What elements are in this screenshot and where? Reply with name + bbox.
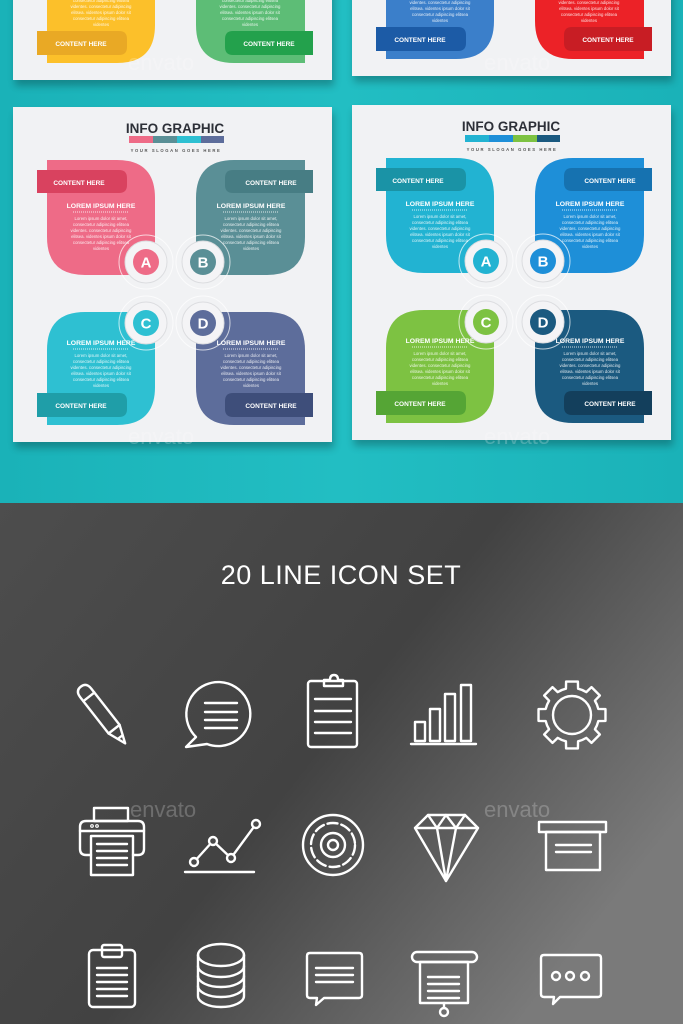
card D green: CONTENT HERE bbox=[243, 41, 295, 48]
card C: videntes. consectetur adipiscing bbox=[71, 365, 132, 370]
icon: diamond bbox=[415, 815, 478, 881]
card B: videntes bbox=[243, 246, 259, 251]
card B: LOREM IPSUM HERE bbox=[217, 203, 286, 210]
icon: gear bbox=[539, 682, 605, 748]
card D red bbox=[535, 0, 652, 59]
card A: videntes. consectetur adipiscing bbox=[71, 228, 132, 233]
card D red: CONTENT HERE bbox=[582, 37, 634, 44]
badges A B C D bbox=[459, 234, 570, 349]
card C: Lorem ipsum dolor sit amet, bbox=[413, 351, 467, 356]
card C: Lorem ipsum dolor sit amet, bbox=[74, 353, 128, 358]
card B bbox=[535, 158, 652, 273]
watermarks: envato bbox=[484, 797, 550, 822]
card C bbox=[37, 312, 155, 425]
card D: consectetur adipiscing elitsea bbox=[562, 375, 619, 380]
icon: chat box bbox=[307, 953, 362, 1005]
watermarks: envato bbox=[484, 424, 550, 449]
card C: LOREM IPSUM HERE bbox=[67, 340, 136, 347]
title bbox=[462, 119, 560, 152]
card D: CONTENT HERE bbox=[584, 401, 636, 408]
panel: top-right (blue/red) bbox=[352, 0, 673, 82]
icon set grid bbox=[75, 675, 606, 1016]
card D green: elitsea. videntes ipsum dolor sit bbox=[220, 10, 281, 15]
heading: 20 LINE ICON SET: 20 LINE ICON SET bbox=[221, 560, 461, 590]
card B: consectetur adipiscing elitsea bbox=[223, 240, 280, 245]
card C blue: elitsea. videntes ipsum dolor sit bbox=[410, 6, 471, 11]
card C yellow: consectetur adipiscing elitsea bbox=[73, 16, 130, 21]
card D: LOREM IPSUM HERE bbox=[217, 340, 286, 347]
card C blue: videntes bbox=[432, 18, 448, 23]
card B: consectetur adipiscing elitsea bbox=[562, 220, 619, 225]
card C yellow bbox=[37, 0, 155, 63]
card B: elitsea. videntes ipsum dolor sit bbox=[560, 232, 621, 237]
badges A B C D: B bbox=[198, 254, 209, 272]
card D red: videntes. consectetur adipiscing bbox=[559, 0, 620, 5]
badges A B C D: B bbox=[538, 254, 549, 270]
card D: videntes bbox=[582, 381, 598, 386]
badges A B C D: C bbox=[481, 314, 492, 332]
card A: videntes bbox=[93, 246, 109, 251]
card C: consectetur adipiscing elitsea bbox=[412, 375, 469, 380]
card B: CONTENT HERE bbox=[245, 180, 297, 187]
card A: videntes bbox=[432, 244, 448, 249]
title: YOUR SLOGAN GOES HERE bbox=[131, 148, 221, 153]
card D: consectetur adipiscing elitsea bbox=[223, 359, 280, 364]
card C bbox=[376, 310, 494, 423]
card A: videntes. consectetur adipiscing bbox=[410, 226, 471, 231]
card D red: videntes bbox=[581, 18, 597, 23]
card A: Lorem ipsum dolor sit amet, bbox=[413, 214, 467, 219]
icon: pencil bbox=[75, 682, 131, 748]
card A: consectetur adipiscing elitsea bbox=[73, 222, 130, 227]
icon: printer bbox=[80, 808, 144, 875]
card B: CONTENT HERE bbox=[584, 178, 636, 185]
card D red: consectetur adipiscing elitsea bbox=[561, 12, 618, 17]
card C: consectetur adipiscing elitsea bbox=[73, 377, 130, 382]
card C yellow: CONTENT HERE bbox=[55, 41, 107, 48]
icon: bar chart bbox=[411, 685, 476, 744]
card D green: videntes bbox=[242, 22, 258, 27]
card B: videntes bbox=[582, 244, 598, 249]
watermarks bbox=[128, 50, 550, 822]
card C yellow: elitsea. videntes ipsum dolor sit bbox=[71, 10, 132, 15]
card A: consectetur adipiscing elitsea bbox=[412, 220, 469, 225]
badges A B C D: D bbox=[198, 316, 209, 332]
card A: elitsea. videntes ipsum dolor sit bbox=[71, 234, 132, 239]
card D red: elitsea. videntes ipsum dolor sit bbox=[559, 6, 620, 11]
card D green: consectetur adipiscing elitsea bbox=[222, 16, 279, 21]
dark icon section background bbox=[0, 503, 683, 1024]
icon: target chip bbox=[303, 815, 363, 875]
badges A B C D bbox=[119, 235, 230, 350]
card D: Lorem ipsum dolor sit amet, bbox=[224, 353, 278, 358]
icon: clipboard bbox=[308, 675, 357, 747]
card D: videntes. consectetur adipiscing bbox=[560, 363, 621, 368]
title: YOUR SLOGAN GOES HERE bbox=[467, 147, 557, 152]
card B: videntes. consectetur adipiscing bbox=[221, 228, 282, 233]
card C: elitsea. videntes ipsum dolor sit bbox=[410, 369, 471, 374]
card C: LOREM IPSUM HERE bbox=[406, 338, 475, 345]
title bbox=[126, 121, 224, 153]
card D: elitsea. videntes ipsum dolor sit bbox=[560, 369, 621, 374]
card A: CONTENT HERE bbox=[53, 180, 105, 187]
badges A B C D: A bbox=[481, 254, 492, 270]
icon: presentation board bbox=[412, 952, 477, 1016]
card C: elitsea. videntes ipsum dolor sit bbox=[71, 371, 132, 376]
card C: CONTENT HERE bbox=[394, 401, 446, 408]
card B: Lorem ipsum dolor sit amet, bbox=[224, 216, 278, 221]
card B: LOREM IPSUM HERE bbox=[556, 201, 625, 208]
card B: consectetur adipiscing elitsea bbox=[562, 238, 619, 243]
card A: LOREM IPSUM HERE bbox=[67, 203, 136, 210]
icon: coin stack database bbox=[198, 944, 244, 1007]
card D: videntes. consectetur adipiscing bbox=[221, 365, 282, 370]
card A: CONTENT HERE bbox=[392, 178, 444, 185]
card A: consectetur adipiscing elitsea bbox=[412, 238, 469, 243]
watermarks: envato bbox=[484, 50, 550, 75]
card A: consectetur adipiscing elitsea bbox=[73, 240, 130, 245]
card A: elitsea. videntes ipsum dolor sit bbox=[410, 232, 471, 237]
card C blue: videntes. consectetur adipiscing bbox=[410, 0, 471, 5]
card C: consectetur adipiscing elitsea bbox=[73, 359, 130, 364]
card B bbox=[196, 160, 313, 275]
icon: speech bubble bbox=[186, 682, 250, 747]
card D: LOREM IPSUM HERE bbox=[556, 338, 625, 345]
badges A B C D: C bbox=[141, 316, 152, 332]
card C yellow: videntes. consectetur adipiscing bbox=[71, 4, 132, 9]
watermarks: envato bbox=[128, 50, 194, 75]
card D bbox=[535, 310, 652, 423]
card C blue bbox=[376, 0, 494, 59]
card C yellow: videntes bbox=[93, 22, 109, 27]
icon: archive box bbox=[539, 822, 606, 870]
card D: Lorem ipsum dolor sit amet, bbox=[563, 351, 617, 356]
card C: consectetur adipiscing elitsea bbox=[412, 357, 469, 362]
card C: CONTENT HERE bbox=[55, 403, 107, 410]
card C blue: consectetur adipiscing elitsea bbox=[412, 12, 469, 17]
card C blue: CONTENT HERE bbox=[394, 37, 446, 44]
card B: elitsea. videntes ipsum dolor sit bbox=[221, 234, 282, 239]
icon: small clipboard bbox=[89, 945, 135, 1007]
panel: left infographic (pink/grey/cyan/slate) bbox=[13, 107, 334, 448]
card A: Lorem ipsum dolor sit amet, bbox=[74, 216, 128, 221]
card C: videntes. consectetur adipiscing bbox=[410, 363, 471, 368]
card B: videntes. consectetur adipiscing bbox=[560, 226, 621, 231]
card D: consectetur adipiscing elitsea bbox=[223, 377, 280, 382]
card C: videntes bbox=[432, 381, 448, 386]
panel: top-left (yellow/green) bbox=[13, 0, 334, 86]
card B: consectetur adipiscing elitsea bbox=[223, 222, 280, 227]
card D green: videntes. consectetur adipiscing bbox=[220, 4, 281, 9]
card A: LOREM IPSUM HERE bbox=[406, 201, 475, 208]
badges A B C D: D bbox=[538, 314, 549, 332]
card A bbox=[37, 160, 155, 275]
watermarks: envato bbox=[128, 424, 194, 449]
panel: right infographic (cyan/blue/green/navy) bbox=[352, 105, 673, 446]
card D green bbox=[196, 0, 313, 63]
card C: videntes bbox=[93, 383, 109, 388]
title: INFO GRAPHIC bbox=[462, 119, 560, 134]
badges A B C D: A bbox=[141, 254, 152, 272]
card D: videntes bbox=[243, 383, 259, 388]
card B: Lorem ipsum dolor sit amet, bbox=[563, 214, 617, 219]
card D bbox=[196, 312, 313, 425]
card A bbox=[376, 158, 494, 273]
icon: line chart bbox=[185, 820, 260, 872]
watermarks: envato bbox=[130, 797, 196, 822]
card D: CONTENT HERE bbox=[245, 403, 297, 410]
title: INFO GRAPHIC bbox=[126, 121, 224, 136]
icon: chat dots bbox=[541, 955, 601, 1004]
card D: consectetur adipiscing elitsea bbox=[562, 357, 619, 362]
card D: elitsea. videntes ipsum dolor sit bbox=[221, 371, 282, 376]
